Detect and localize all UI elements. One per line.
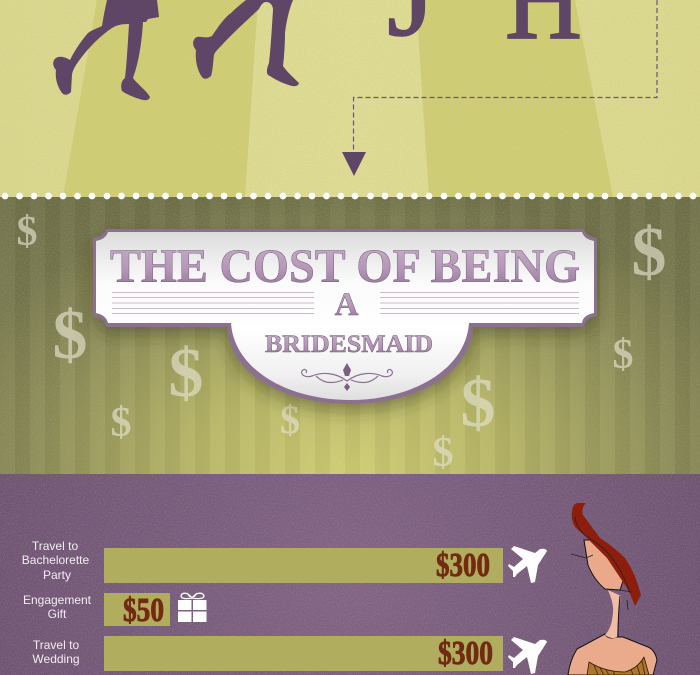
label: Gift	[48, 607, 67, 621]
title line: the cost of being: THE COST OF BEING	[110, 240, 580, 293]
decorative lines	[112, 292, 579, 314]
dress	[587, 657, 649, 675]
dollar signs: $	[460, 365, 496, 442]
dollar signs: $	[612, 332, 634, 378]
silhouette: walking figure left	[53, 0, 159, 100]
label: Wedding	[32, 652, 80, 666]
dashed connector arrow	[342, 0, 657, 176]
dollar signs: $	[632, 214, 666, 291]
value: $300	[438, 635, 493, 672]
ornament	[302, 363, 392, 391]
large heading letters, cropped at the top	[387, 0, 582, 64]
label: Engagement	[23, 593, 92, 607]
hair strands and lash	[571, 517, 632, 610]
hair	[572, 503, 641, 606]
label: Bachelorette	[22, 553, 90, 567]
section background: spotlight stage	[0, 0, 700, 197]
dollar signs: $	[280, 397, 300, 442]
title word: a: A	[335, 287, 359, 323]
dollar signs: $	[16, 209, 38, 255]
icon: plane	[508, 637, 547, 674]
perforated dot divider	[2, 193, 696, 199]
plaque shape	[93, 229, 597, 404]
silhouette: walking figure right	[193, 0, 299, 86]
icon: gift	[178, 593, 206, 622]
section background: purple cost chart	[0, 474, 700, 675]
dollar signs: $	[52, 297, 88, 374]
bar: travel to bachelorette party	[22, 539, 547, 584]
label: Party	[43, 568, 71, 582]
icon: plane	[508, 546, 547, 583]
value: $50	[123, 592, 164, 629]
title plaque	[93, 229, 597, 404]
bar: travel to wedding	[32, 635, 547, 674]
dress hatching	[594, 661, 645, 675]
face	[584, 540, 625, 590]
dollar signs: $	[168, 335, 204, 412]
dollar signs: $	[432, 430, 454, 476]
dollar signs	[16, 209, 666, 476]
illustration: bridesmaid	[568, 503, 657, 675]
label: Travel to	[32, 539, 78, 553]
section background: striped money band	[0, 197, 700, 474]
bar: engagement gift	[23, 592, 206, 629]
shoulders	[568, 634, 657, 675]
label: Travel to	[33, 638, 79, 652]
neck	[605, 590, 621, 638]
value: $300	[436, 547, 490, 584]
title word: bridesmaid: BRIDESMAID	[265, 331, 433, 358]
dollar signs: $	[110, 400, 132, 446]
